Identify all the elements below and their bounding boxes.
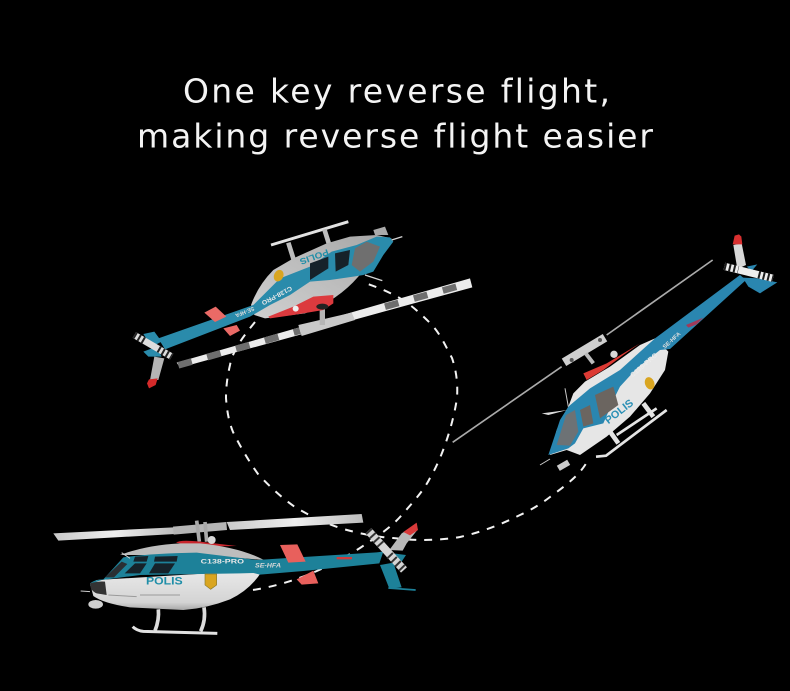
- lettering: SE-HFA: [255, 562, 281, 569]
- lettering: POLIS: [146, 575, 183, 587]
- lettering: C138-PRO: [201, 559, 244, 566]
- cabin and tail boom: [81, 536, 383, 610]
- lettering: POLIS: [603, 397, 636, 427]
- tail fins and rotor: [134, 332, 172, 388]
- lettering: [234, 247, 330, 318]
- dashed flight path: [226, 284, 587, 590]
- cabin and tail boom: [540, 275, 746, 471]
- emblem: [643, 376, 656, 391]
- lettering: C138-PRO: [629, 352, 659, 379]
- helicopter: top, inverted: [134, 222, 472, 388]
- main rotor: [453, 260, 713, 442]
- main rotor: [53, 514, 363, 542]
- lettering: [146, 559, 281, 587]
- helicopter: right, climbing reversed: [453, 234, 777, 471]
- stabilizer: [280, 544, 318, 585]
- main rotor: [177, 278, 472, 368]
- skids: [596, 408, 667, 457]
- emblem: [272, 268, 285, 283]
- lettering: C138-PRO: [260, 284, 293, 306]
- tail fins and rotor: [368, 523, 418, 590]
- emblem: [205, 574, 217, 589]
- skid struts: [288, 229, 329, 261]
- skid struts: [610, 403, 653, 443]
- title: One key reverse flight,: [183, 72, 610, 110]
- lettering: SE-HFA: [662, 331, 682, 350]
- skids: [271, 222, 348, 245]
- stabilizer: [204, 307, 240, 336]
- helicopter: bottom, level flight: [53, 514, 418, 633]
- skids: [155, 607, 205, 631]
- lettering: POLIS: [298, 247, 330, 267]
- title: [137, 72, 653, 156]
- cabin and tail boom: [158, 227, 402, 349]
- skid rail: [133, 627, 217, 633]
- title: making reverse flight easier: [137, 116, 653, 156]
- lettering: SE-HFA: [234, 305, 255, 318]
- lettering: [603, 331, 682, 427]
- tail fins and rotor: [724, 234, 777, 293]
